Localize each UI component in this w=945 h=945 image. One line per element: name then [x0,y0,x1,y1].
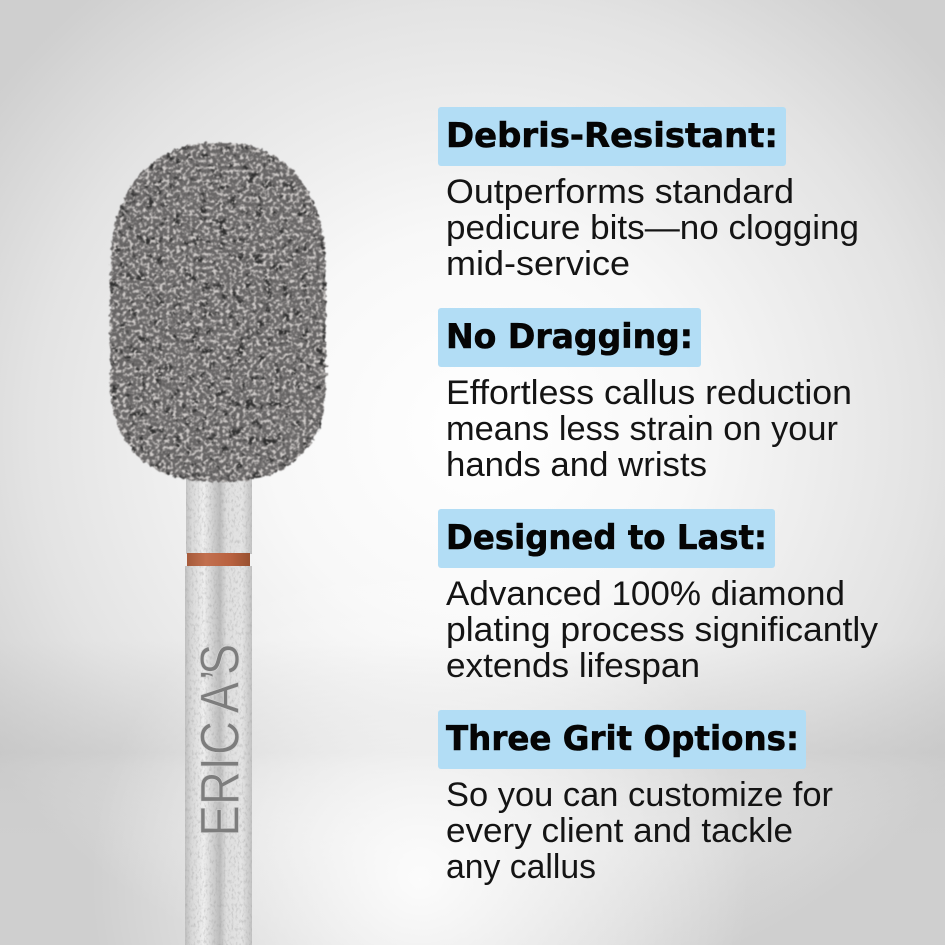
heading label: No Dragging: [446,317,693,356]
description: any callus [446,848,596,886]
feature: Debris-Resistant [438,107,859,283]
description: plating process significantly [446,611,878,649]
description: every client and tackle [446,812,793,850]
feature: No Dragging [438,308,852,484]
description: So you can customize for [446,776,833,814]
heading label [438,710,806,769]
product: diamond pedicure bit [110,142,326,945]
description [446,374,852,484]
diamond-coated head [110,142,326,482]
description: pedicure bits—no clogging [446,209,859,247]
description: means less strain on your [446,410,838,448]
description: extends lifespan [446,647,700,685]
description [446,776,833,886]
description: mid-service [446,245,630,283]
description [446,173,859,283]
description: Outperforms standard [446,173,794,211]
orange grit ring [187,553,250,566]
feature: Designed to Last [438,509,878,685]
bit shank upper section [186,478,252,554]
heading label: Debris-Resistant: [446,116,778,155]
description: hands and wrists [446,446,707,484]
heading label [438,107,786,166]
description: Advanced 100% diamond [446,575,845,613]
heading label [438,509,775,568]
heading label: Three Grit Options: [446,719,799,758]
heading label [438,308,701,367]
description [446,575,878,685]
description: Effortless callus reduction [446,374,852,412]
heading label: Designed to Last: [446,518,767,557]
bit shank lower section [185,566,252,945]
feature: Three Grit Options [438,710,833,886]
engraved brand name: ERICA’S [189,644,250,836]
